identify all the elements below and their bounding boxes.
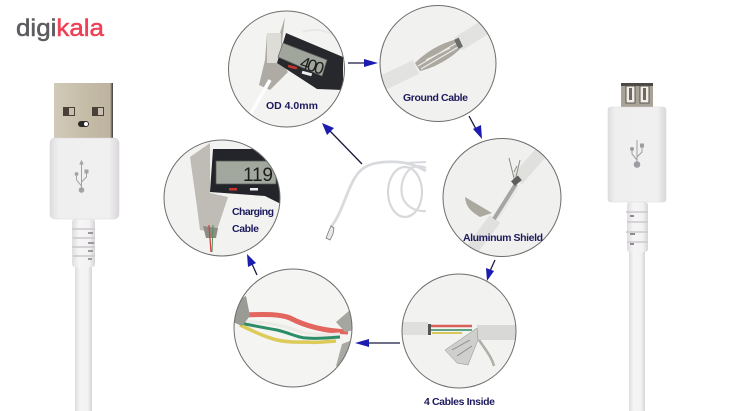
digital reading: 119	[243, 165, 273, 186]
arrow: aluminum to 4 cables	[486, 260, 495, 281]
digital reading: 400	[298, 53, 326, 79]
icon: USB trident	[75, 161, 88, 192]
panel: aluminum shield	[443, 138, 561, 256]
caliper body	[210, 149, 283, 205]
panel: OD 4.0mm caliper	[228, 11, 344, 127]
panel: 4 cables inside	[400, 274, 521, 388]
metal plug	[54, 83, 113, 138]
arrow: OD to ground	[348, 59, 378, 67]
panel: charging cable caliper: Cable	[232, 223, 259, 235]
logo: digikala: digikala	[16, 15, 105, 42]
cable: left	[75, 262, 92, 411]
center photo: coiled cable	[326, 162, 426, 240]
frayed wires	[465, 197, 492, 217]
panel: charging cable caliper	[164, 140, 283, 256]
caliper jaw	[259, 17, 288, 90]
micro plug	[621, 83, 653, 108]
strain relief: right	[626, 202, 648, 252]
label: Ground Cable	[403, 92, 468, 104]
micro-USB connector	[608, 83, 666, 411]
USB-A connector	[50, 83, 119, 411]
arrow: center to OD	[322, 123, 362, 164]
frayed braids	[233, 296, 250, 326]
plastic housing	[608, 107, 666, 202]
plastic housing	[50, 138, 119, 219]
foil	[445, 328, 478, 365]
label: OD 4.0mm	[266, 100, 318, 112]
panel: ground cable	[372, 6, 500, 122]
braided shield	[415, 39, 462, 71]
panel: colored wires	[233, 269, 354, 387]
caliper jaws	[190, 143, 228, 233]
icon: USB trident	[630, 140, 644, 167]
label: 4 cables inside: 4 Cables Inside	[424, 396, 495, 408]
arrow: ground to aluminum	[469, 116, 482, 139]
arrow: 4 cables to wires	[355, 339, 400, 347]
strain relief: left	[72, 219, 95, 267]
cable: right	[629, 248, 645, 411]
label: Aluminum Shield	[463, 232, 543, 244]
wires	[243, 314, 348, 332]
arrow: wires to charging	[247, 254, 257, 275]
label: Charging	[232, 206, 274, 218]
caliper body	[277, 33, 343, 90]
